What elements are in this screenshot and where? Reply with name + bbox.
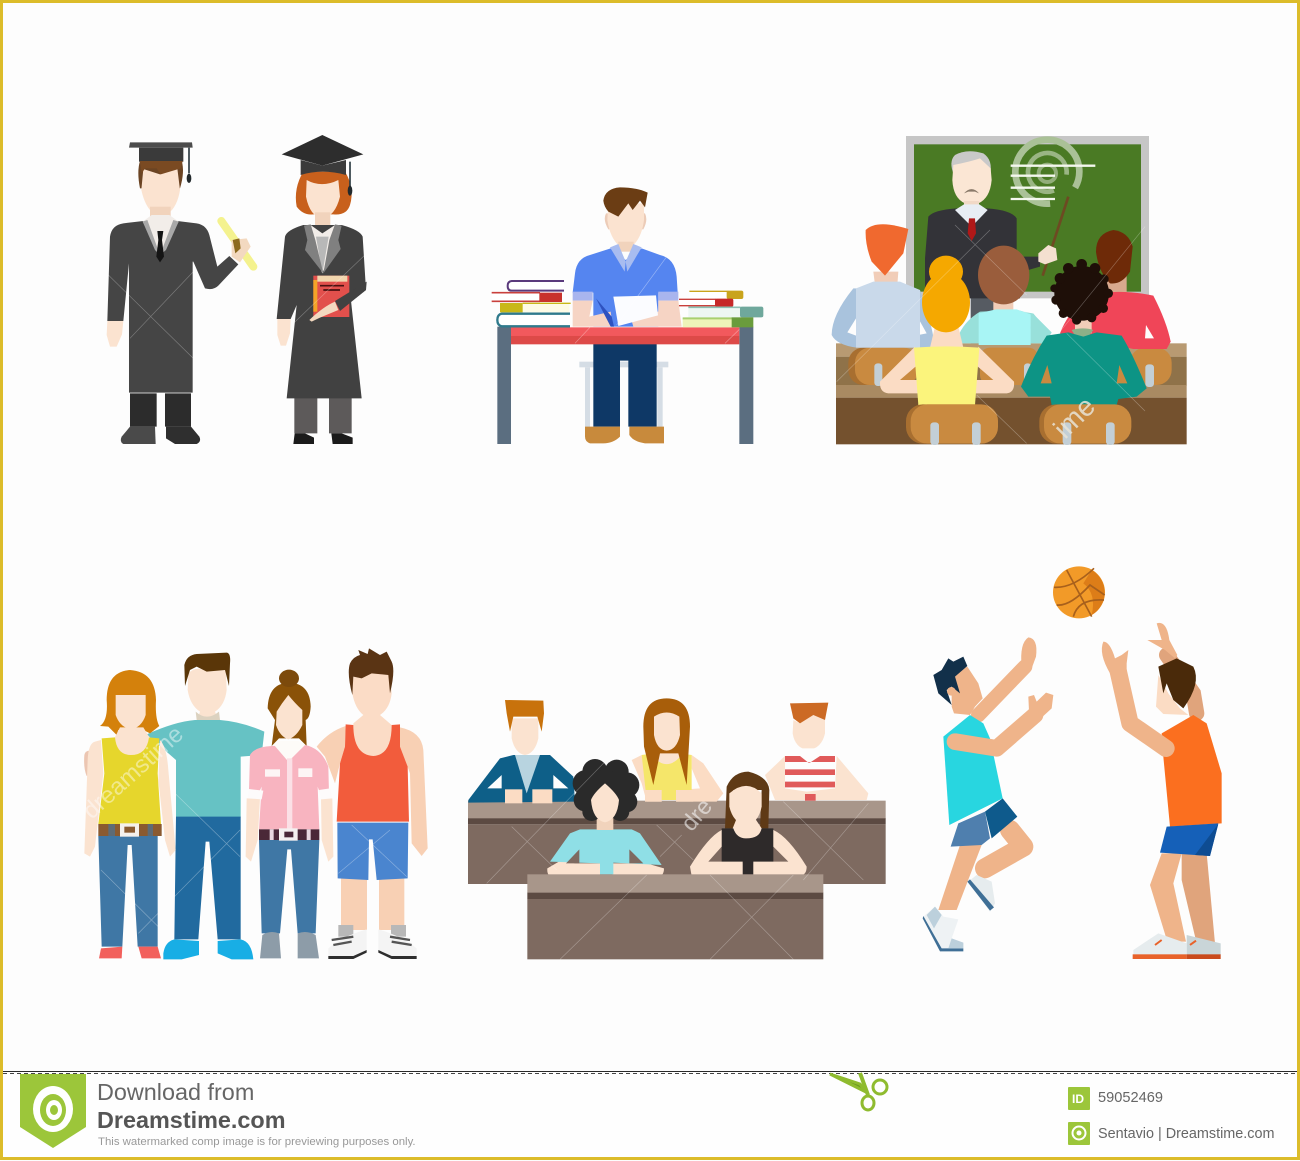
icon: basketball [1053, 566, 1105, 618]
image id: 59052469 [1098, 1090, 1163, 1106]
watermark spiral [1013, 137, 1082, 206]
figure: man in red tank top [317, 648, 428, 959]
figure: student in black top [690, 772, 807, 876]
left book stack [492, 281, 571, 326]
figure: student [573, 187, 682, 443]
figure: woman in yellow tank [84, 670, 176, 958]
watermark text: dre [676, 793, 717, 836]
back desk [468, 801, 886, 884]
brand name: Dreamstime.com [97, 1107, 286, 1133]
student: light blue shirt [957, 246, 1060, 345]
download heading: Download from [97, 1079, 254, 1105]
watermark crosses [837, 225, 1145, 443]
icon: ID badge [1068, 1087, 1090, 1110]
pointer [1043, 197, 1068, 276]
watermark crosses [487, 760, 868, 959]
watermark strokes [575, 257, 739, 343]
scene: lecture classroom [832, 136, 1187, 445]
footer strip [3, 1072, 1297, 1158]
figure: female graduate [277, 135, 367, 444]
figure: man in teal t-shirt [84, 653, 264, 959]
desks [836, 343, 1187, 444]
back row chairs [848, 348, 1172, 387]
student: red top [1060, 230, 1171, 349]
watermark notice: This watermarked comp image is for previewing purposes only. [98, 1136, 416, 1148]
watermark crosses [108, 253, 367, 358]
student: yellow tank, orange bun [880, 256, 1014, 405]
figure: right player [1102, 623, 1222, 959]
right book stack [679, 291, 763, 327]
watermark crosses [101, 793, 407, 933]
student: teal sweater, afro [1021, 259, 1147, 405]
watermark text: dreamstime [78, 721, 189, 824]
figure: blue jacket student [468, 700, 575, 803]
hair [603, 187, 648, 217]
icon: green download banner [20, 1074, 86, 1148]
icon: scissors [830, 1073, 887, 1110]
figure: male graduate [107, 142, 253, 444]
front desk [527, 874, 823, 959]
icon: ID badge: ID [1072, 1092, 1084, 1106]
scene: basketball players [923, 566, 1222, 959]
author credit: Sentavio | Dreamstime.com [1098, 1126, 1274, 1142]
scene: students at lecture hall desks [468, 698, 886, 959]
front row chairs [906, 404, 1131, 445]
figure: long-haired student in yellow [632, 698, 723, 802]
watermark text: ime [1047, 390, 1101, 444]
student: red hair [832, 224, 934, 348]
scene: student at desk with books [492, 187, 763, 444]
chalkboard [906, 136, 1149, 298]
chair [579, 362, 668, 427]
scene: graduates [107, 135, 367, 444]
figure: striped tank student [765, 703, 868, 801]
figure: left player [923, 637, 1053, 951]
figure: curly-haired student in light blue [547, 759, 664, 877]
figure: teacher [925, 151, 1057, 343]
board writing [1011, 166, 1095, 199]
figure: woman in pink shirt [246, 670, 333, 958]
scene: group of four standing students [78, 648, 428, 959]
table [497, 327, 753, 444]
icon: copyright badge [1068, 1122, 1090, 1145]
